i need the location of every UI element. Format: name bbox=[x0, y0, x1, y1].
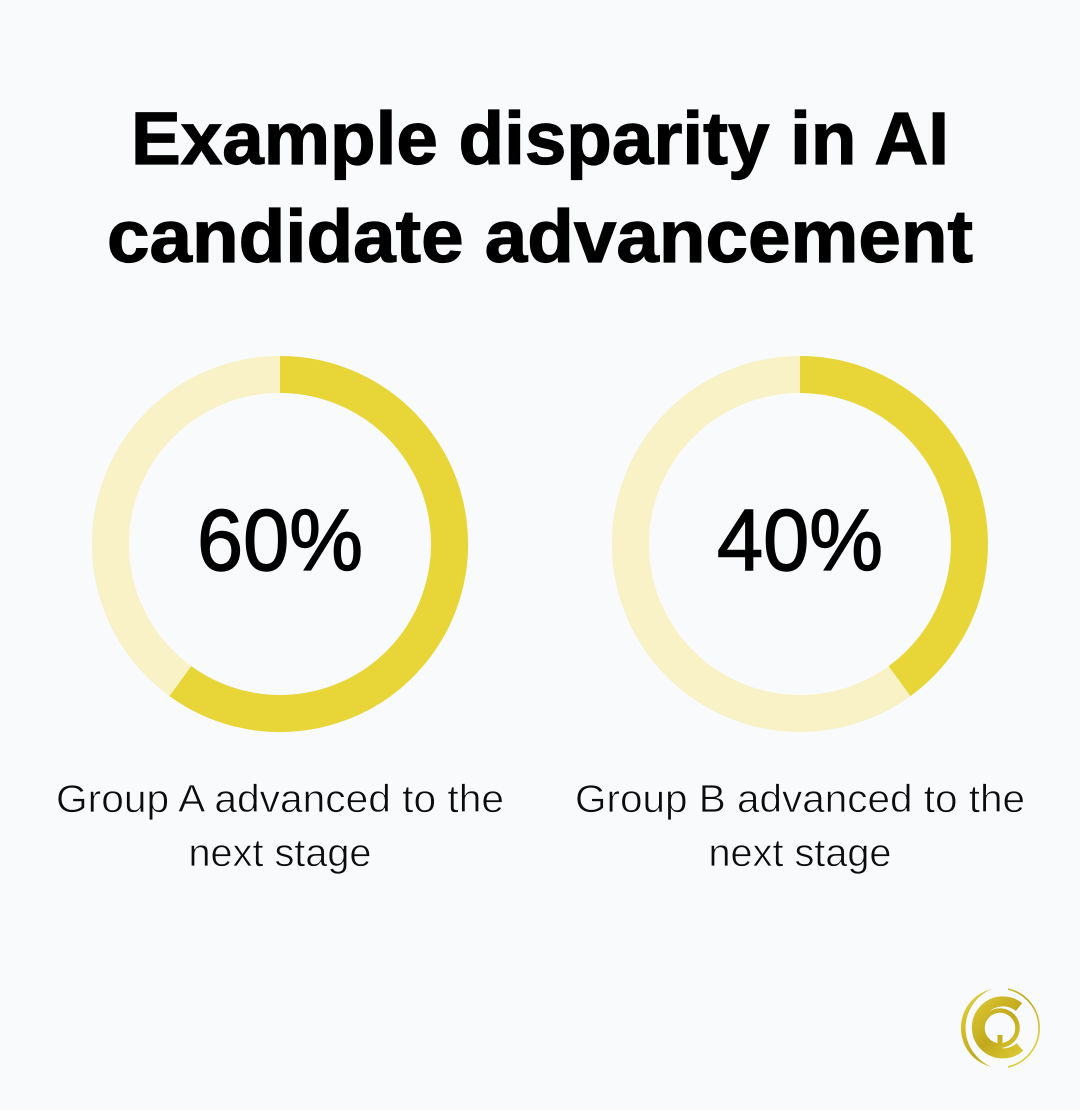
caption: Group B bbox=[575, 778, 1025, 875]
caption: Group A: Group A advanced to the bbox=[56, 778, 504, 821]
caption: Group B: next stage bbox=[708, 832, 892, 875]
caption: Group B: Group B advanced to the bbox=[575, 778, 1025, 821]
title: candidate advancement bbox=[107, 195, 973, 278]
title bbox=[107, 97, 973, 278]
value: 40%: 40% bbox=[717, 492, 883, 589]
panel: Group A bbox=[56, 374, 504, 875]
value: 60%: 60% bbox=[197, 492, 363, 589]
donut chart: 40% bbox=[630, 374, 970, 714]
caption: Group A: next stage bbox=[188, 832, 372, 875]
panel: Group B bbox=[575, 374, 1025, 875]
caption: Group A bbox=[56, 778, 504, 875]
donut chart: 60% bbox=[110, 374, 450, 714]
title: Example disparity in AI bbox=[131, 97, 949, 180]
icon: gold logo bbox=[961, 989, 1039, 1067]
